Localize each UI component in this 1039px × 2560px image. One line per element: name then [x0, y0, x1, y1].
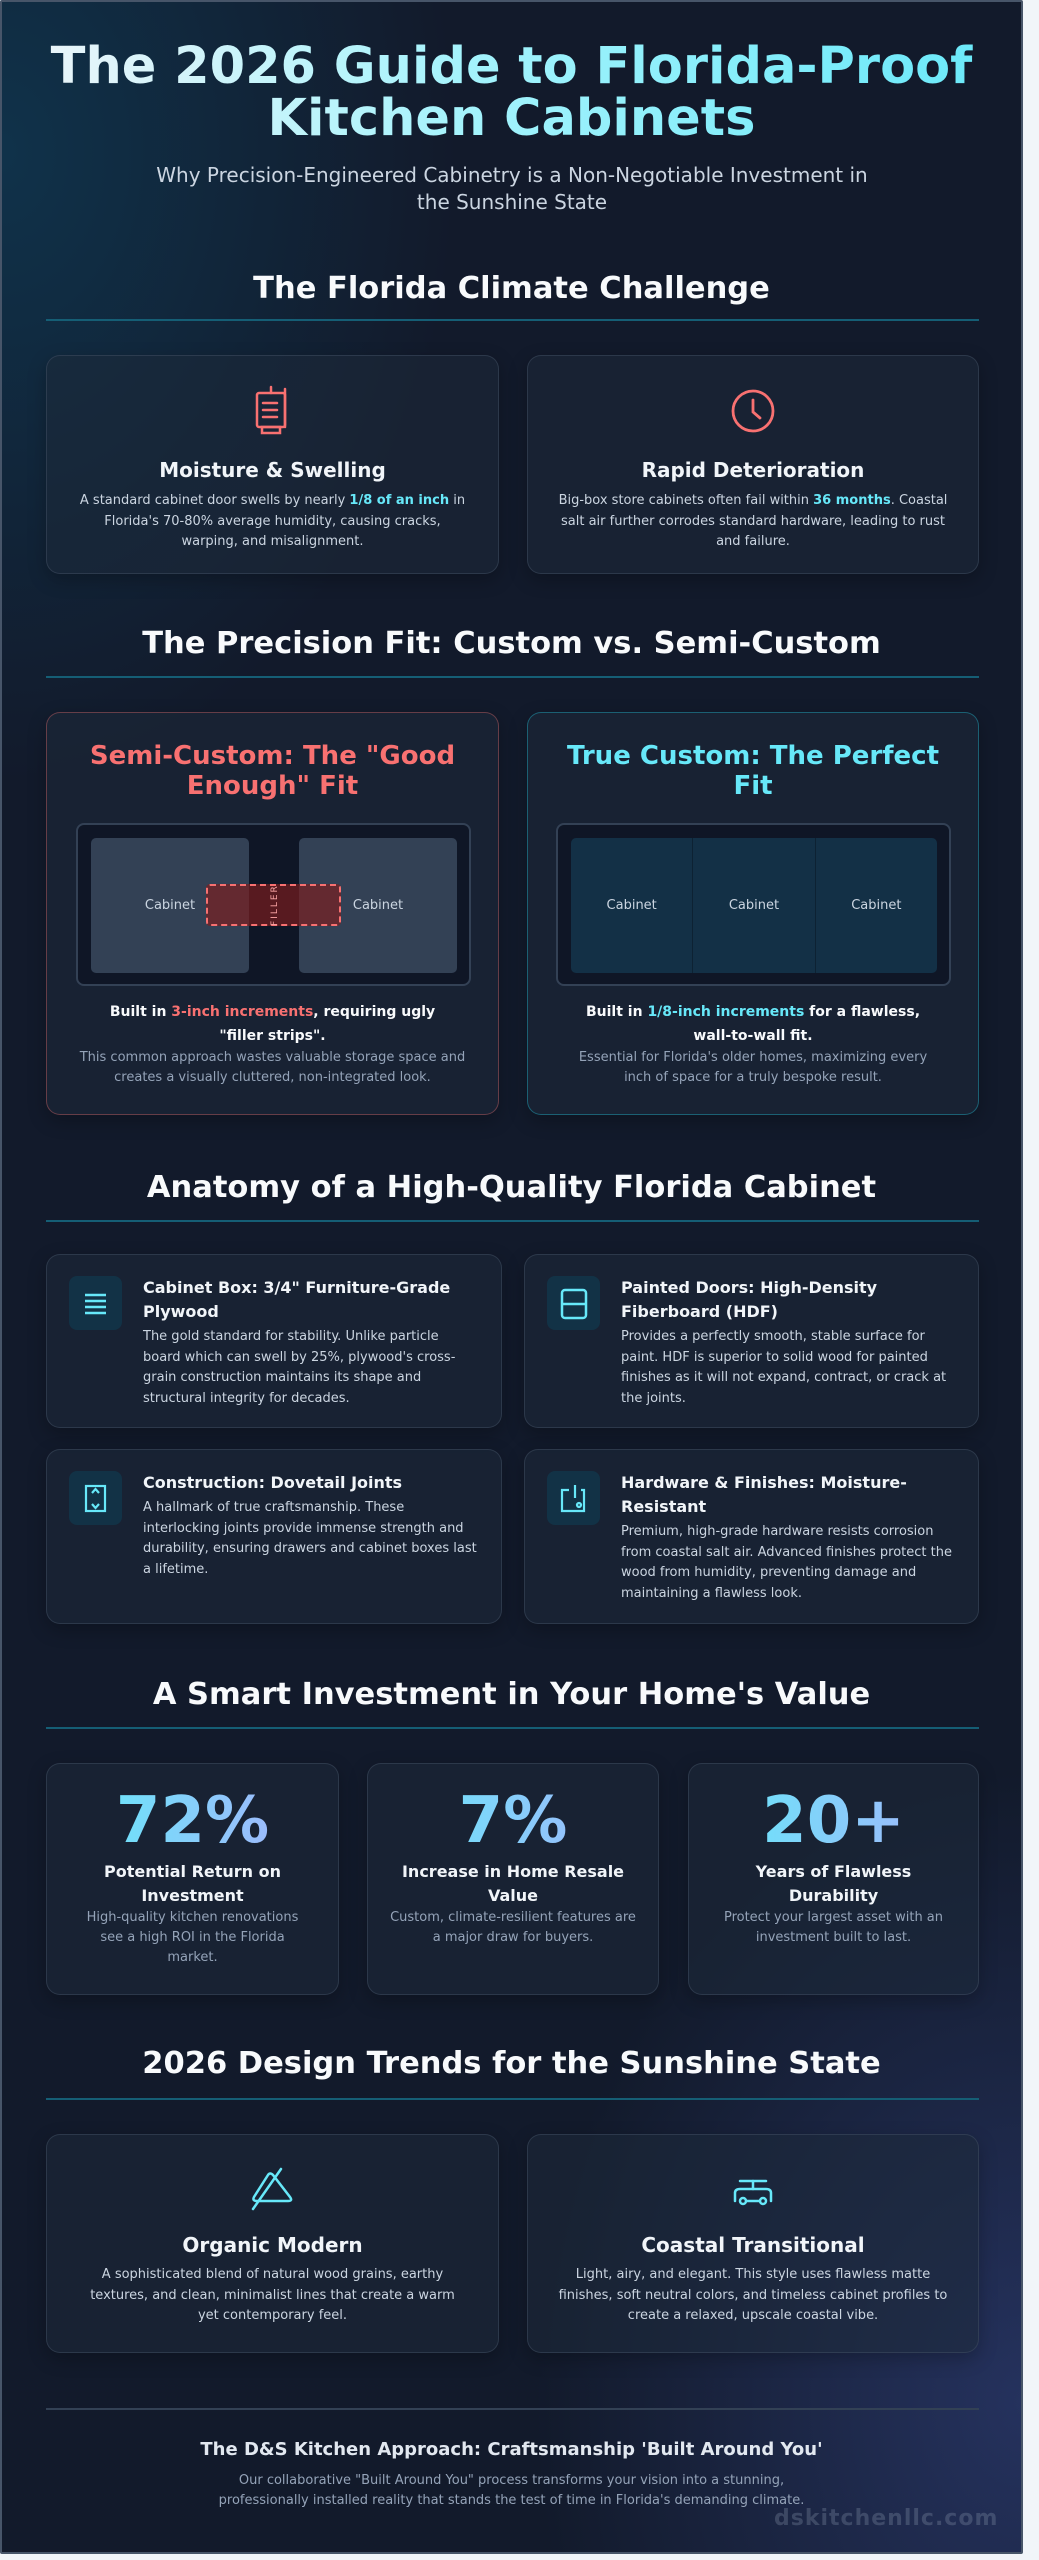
heading: investment: A Smart Investment in Your Home's Value — [153, 1677, 870, 1712]
diagram: seamless cabinets: Cabinet — [607, 898, 657, 913]
panel: coastal transitional — [527, 2134, 979, 2353]
panel: rapid deterioration — [527, 355, 979, 574]
watermark: dskitchenllc.com — [774, 2506, 998, 2531]
title — [2, 41, 1021, 145]
title: Coastal Transitional — [641, 2233, 865, 2257]
text: Premium, high-grade hardware resists corrosion from coastal salt air. Advanced finishes protect the wood from humidity, preventing damage and maintaining a flawless look. — [621, 1524, 952, 1600]
diagram: cabinets with filler: Cabinet — [353, 898, 403, 913]
body text: A sophisticated blend of natural wood grains, earthy textures, and clean, minimalist lines that create a warm yet contemporary feel. — [90, 2267, 455, 2323]
grey text: Essential for Florida's older homes, maximizing every inch of space for a truly bespoke result. — [579, 1050, 927, 1085]
icon: clock — [732, 390, 774, 432]
stat: 20+: Protect your largest asset with an investment built to last. — [724, 1910, 943, 1945]
heading: precision fit: The Precision Fit: Custom vs. Semi-Custom — [142, 626, 881, 661]
bold text: Built in 1/8-inch increments for a flawless, wall-to-wall fit. — [586, 1004, 920, 1044]
bold text: Built in 3-inch increments, requiring ugly "filler strips". — [110, 1004, 435, 1044]
panel: cabinet box — [46, 1254, 502, 1428]
stat: 7% — [367, 1763, 659, 1995]
stat: 72% — [46, 1763, 339, 1995]
title: Rapid Deterioration — [642, 458, 864, 482]
panel: organic modern — [46, 2134, 499, 2353]
panel: painted doors — [524, 1254, 979, 1428]
heading: anatomy: Anatomy of a High-Quality Florida Cabinet — [147, 1170, 876, 1205]
text: The gold standard for stability. Unlike particle board which can swell by 25%, plywood's cross-grain construction maintains its shape and structural integrity for decades. — [143, 1329, 455, 1406]
filler strip: FILLER — [270, 884, 280, 926]
icon: swelling door — [256, 386, 286, 434]
panel: moisture & swelling — [46, 355, 499, 574]
footer: D&S approach: Our collaborative "Built Around You" process transforms your vision into a stunning, professionally installed reality that stands the test of time in Florida's demanding climate. — [219, 2473, 804, 2508]
stat: 20+: Years of Flawless Durability — [756, 1862, 911, 1905]
text — [142, 1278, 455, 1406]
text: Hardware & Finishes: Moisture-Resistant — [621, 1473, 907, 1516]
stat: 20+: 20+ — [762, 1784, 905, 1858]
subtitle: Why Precision-Engineered Cabinetry is a Non-Negotiable Investment in the Sunshine State — [156, 163, 868, 214]
diagram: seamless cabinets: Cabinet — [729, 898, 779, 913]
stat: 20+ — [688, 1763, 979, 1995]
heading: design trends: 2026 Design Trends for the Sunshine State — [142, 2046, 881, 2081]
title: The 2026 Guide to Florida-Proof — [51, 37, 972, 96]
text — [621, 1473, 952, 1600]
body text: Big-box store cabinets often fail within 36 months. Coastal salt air further corrodes standard hardware, leading to rust and failure. — [559, 493, 947, 549]
stat: 7%: Custom, climate-resilient features are a major draw for buyers. — [390, 1910, 636, 1945]
stat: 72%: Potential Return on Investment — [104, 1862, 281, 1905]
diagram: cabinets with filler — [76, 823, 471, 986]
stat: 72%: 72% — [116, 1784, 269, 1858]
footer: D&S approach: The D&S Kitchen Approach: Craftsmanship 'Built Around You' — [200, 2439, 823, 2460]
icon: joint — [69, 1471, 122, 1525]
diagram: seamless cabinets — [556, 823, 951, 986]
grey text: This common approach wastes valuable storage space and creates a visually cluttered, non-integrated look. — [80, 1050, 465, 1085]
panel: hardware — [524, 1449, 979, 1624]
heading: climate challenge: The Florida Climate Challenge — [253, 271, 770, 306]
diagram: cabinets with filler: Cabinet — [145, 898, 195, 913]
footer: D&S approach — [200, 2439, 823, 2508]
panel: semi-custom — [46, 712, 499, 1115]
panel: dovetail — [46, 1449, 502, 1624]
icon: hardware — [547, 1471, 600, 1525]
stat: 72%: High-quality kitchen renovations see a high ROI in the Florida market. — [87, 1910, 298, 1965]
text — [621, 1278, 946, 1406]
text: Provides a perfectly smooth, stable surface for paint. HDF is superior to solid wood for painted finishes as it will not expand, contract, or crack at the joints. — [621, 1329, 946, 1406]
title: Moisture & Swelling — [159, 458, 386, 482]
title: True Custom: The Perfect Fit — [567, 741, 939, 801]
stat: 7%: Increase in Home Resale Value — [402, 1862, 624, 1905]
title: Semi-Custom: The "Good Enough" Fit — [90, 741, 455, 801]
body text: A standard cabinet door swells by nearly 1/8 of an inch in Florida's 70-80% average humidity, causing cracks, warping, and misalignment. — [80, 493, 465, 549]
text: Painted Doors: High-Density Fiberboard (HDF) — [621, 1278, 877, 1321]
text: Construction: Dovetail Joints — [143, 1473, 402, 1492]
icon: organic — [252, 2168, 292, 2210]
filler strip — [206, 884, 341, 926]
title: Organic Modern — [182, 2233, 363, 2257]
text: A hallmark of true craftsmanship. These interlocking joints provide immense strength and durability, ensuring drawers and cabinet boxes last a lifetime. — [143, 1500, 477, 1576]
body text: Light, airy, and elegant. This style uses flawless matte finishes, soft neutral colors, and timeless cabinet profiles to create a relaxed, upscale coastal vibe. — [559, 2267, 947, 2323]
diagram: seamless cabinets: Cabinet — [851, 898, 901, 913]
icon: layers — [69, 1276, 122, 1330]
panel: true custom — [527, 712, 979, 1115]
icon: coastal — [734, 2180, 772, 2206]
title: Kitchen Cabinets — [267, 89, 756, 148]
stat: 7%: 7% — [459, 1784, 567, 1858]
text: Cabinet Box: 3/4" Furniture-Grade Plywood — [143, 1278, 450, 1321]
icon: door — [547, 1276, 600, 1330]
